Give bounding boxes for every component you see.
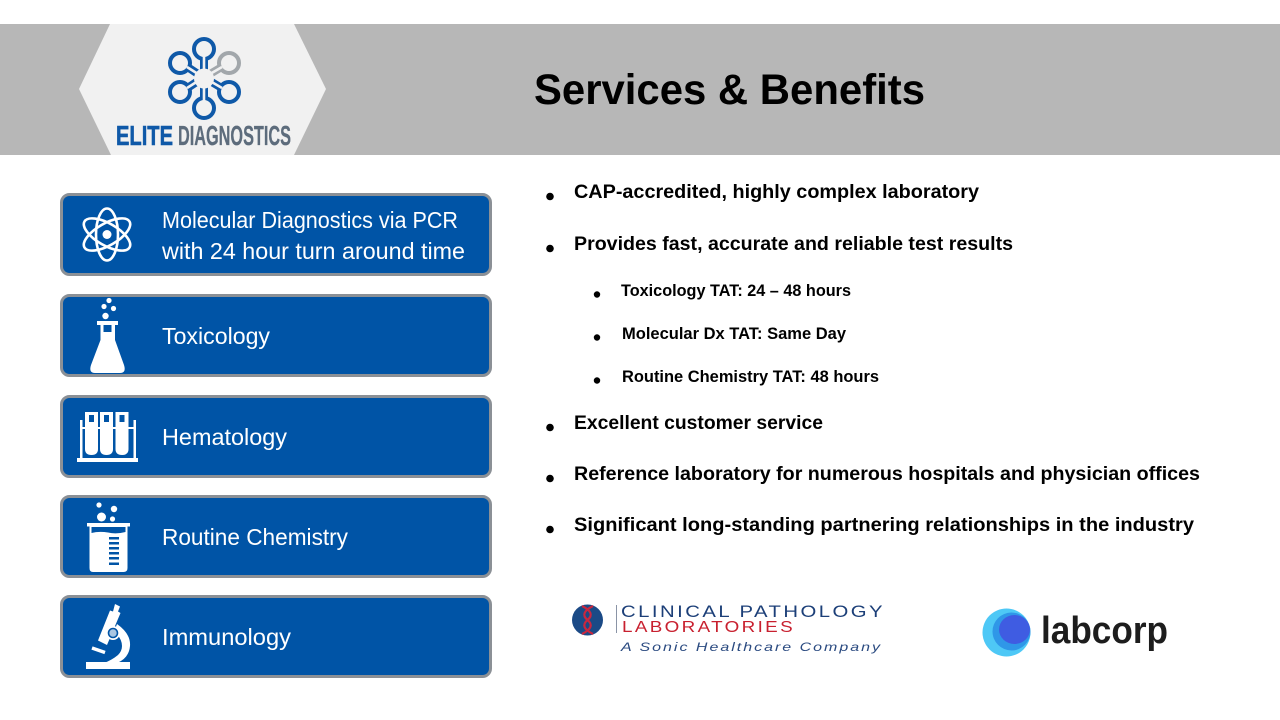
title: Services & Benefits [534, 66, 925, 114]
icon: test tubes [77, 412, 138, 462]
icon: flask [90, 298, 125, 373]
bullet: CAP-accredited: CAP-accredited, highly complex laboratory [574, 182, 979, 203]
label: toxicology: Toxicology [162, 323, 270, 349]
bullet: partnering relationships: Significant long-standing partnering relationships in the industry [574, 515, 1194, 536]
icon: atom [79, 208, 135, 260]
label: routine chemistry: Routine Chemistry [162, 524, 348, 550]
label: hematology: Hematology [162, 424, 288, 450]
logo hexagon: Elite Diagnostics: DIAGNOSTICS [178, 120, 291, 151]
label: immunology: Immunology [162, 624, 292, 650]
sub-bullet: routine chemistry TAT: Routine Chemistry TAT: 48 hours [622, 368, 879, 386]
panel: Toxicology [62, 296, 490, 376]
panel: Routine Chemistry [62, 496, 490, 576]
logo hexagon: Elite Diagnostics: ELITE [116, 120, 173, 151]
logo: Clinical Pathology Laboratories: LABORATORIES [622, 619, 795, 636]
header banner [0, 24, 1280, 155]
label: molecular: Molecular Diagnostics via PCR [162, 207, 458, 233]
logo: Clinical Pathology Laboratories: A Sonic Healthcare Company [620, 640, 882, 654]
panel: Hematology [62, 396, 490, 476]
bullet: fast results: Provides fast, accurate and reliable test results [574, 234, 1013, 255]
panel: Immunology [62, 596, 490, 676]
logo: Labcorp: labcorp [1041, 610, 1168, 652]
sub-bullet: toxicology TAT: Toxicology TAT: 24 – 48 hours [621, 282, 851, 300]
bullet list: services and benefits [546, 182, 1200, 536]
logo: Clinical Pathology Laboratories: CLINICAL PATHOLOGY [621, 603, 885, 621]
sub-bullet: molecular TAT: Molecular Dx TAT: Same Day [622, 325, 847, 343]
label: molecular: with 24 hour turn around time [161, 238, 465, 264]
logo: Clinical Pathology Laboratories [572, 603, 885, 654]
panel: Molecular Diagnostics [62, 194, 490, 274]
logo hexagon: Elite Diagnostics [79, 24, 326, 155]
bullet: customer service: Excellent customer service [574, 413, 823, 434]
icon: microscope [86, 604, 130, 669]
logo: Labcorp [982, 608, 1168, 656]
icon: beaker [87, 502, 130, 572]
bullet: reference laboratory: Reference laboratory for numerous hospitals and physician offices [574, 464, 1200, 485]
